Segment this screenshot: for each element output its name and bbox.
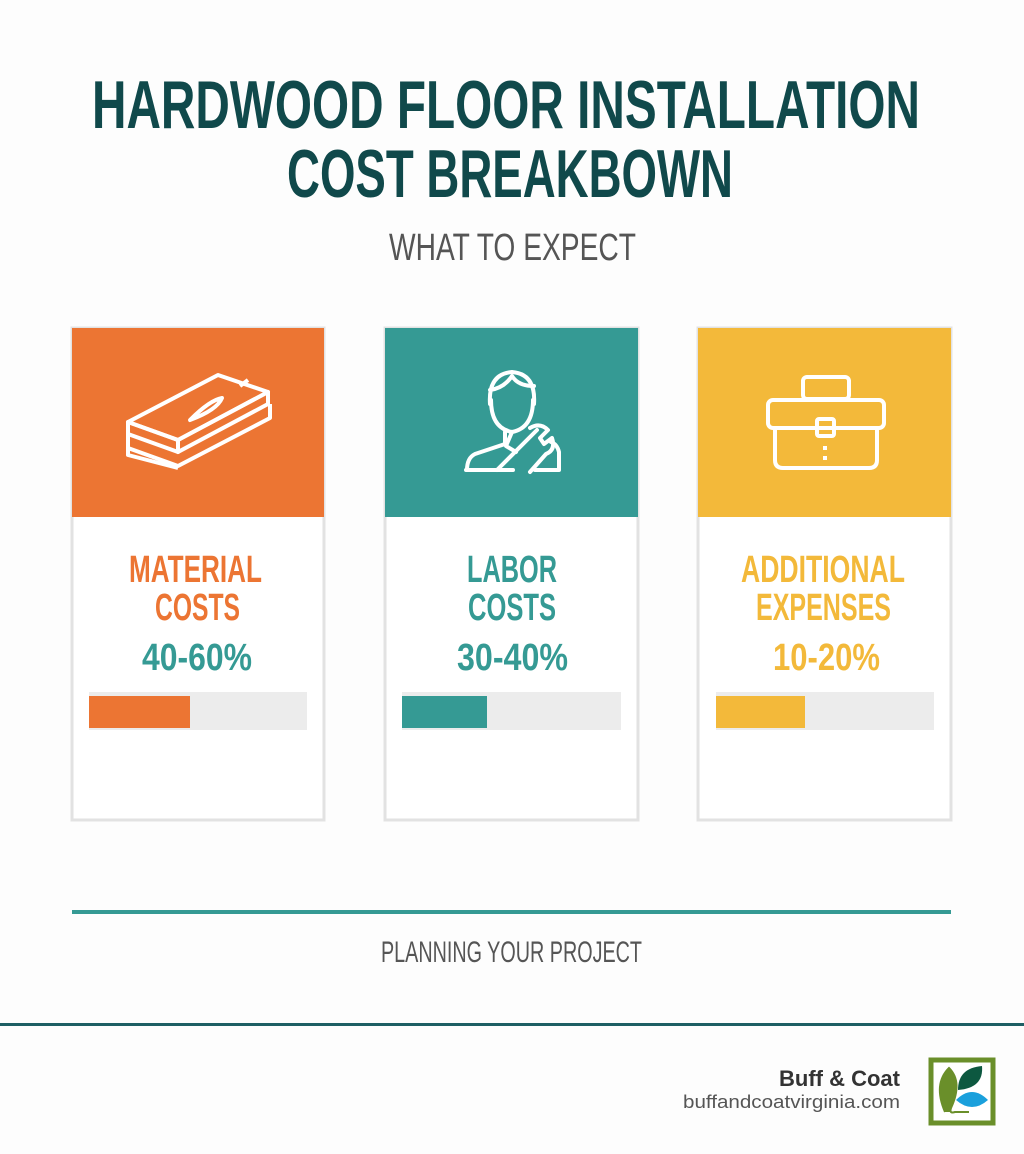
label <box>129 549 262 629</box>
label: LABOR <box>467 549 557 591</box>
progress bar <box>716 692 934 730</box>
label: EXPENSES <box>756 587 891 629</box>
panel: material costs <box>72 328 324 820</box>
label <box>467 549 557 629</box>
label <box>741 549 905 629</box>
subtitle: WHAT TO EXPECT <box>389 227 636 269</box>
icon: wood planks <box>128 375 270 468</box>
label: COSTS <box>155 587 240 629</box>
percentage: 30-40% <box>457 637 568 679</box>
title <box>92 67 920 212</box>
icon: toolbox <box>768 377 884 468</box>
panel: labor costs <box>385 328 638 820</box>
label: ADDITIONAL <box>741 549 905 591</box>
label: MATERIAL <box>129 549 262 591</box>
icon: logo <box>931 1060 993 1123</box>
icon: worker with wrench <box>466 372 559 472</box>
percentage: 40-60% <box>142 637 252 679</box>
brand text <box>683 1066 901 1112</box>
brand text: Buff & Coat <box>779 1066 901 1091</box>
panel: additional expenses <box>698 328 951 820</box>
label: COSTS <box>468 587 556 629</box>
title: COST BREAKBOWN <box>287 136 733 212</box>
progress bar <box>402 692 621 730</box>
section caption: PLANNING YOUR PROJECT <box>381 936 642 969</box>
brand text: buffandcoatvirginia.com <box>683 1092 900 1112</box>
progress bar <box>89 692 307 730</box>
percentage: 10-20% <box>773 637 880 679</box>
